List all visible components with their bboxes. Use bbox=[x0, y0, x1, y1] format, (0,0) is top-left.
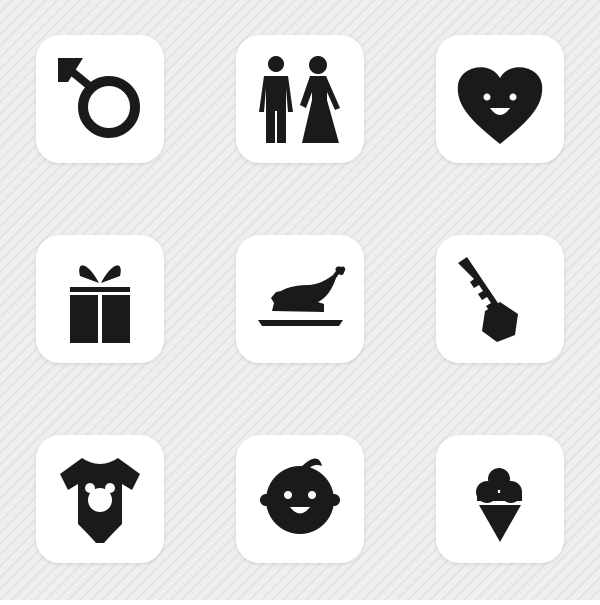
tile: heart bbox=[436, 35, 564, 163]
tile: baby face bbox=[236, 435, 364, 563]
icon: ice cream cone bbox=[476, 468, 522, 542]
tile: male symbol bbox=[36, 35, 164, 163]
icon: male symbol bbox=[58, 58, 135, 133]
icon: smiling heart bbox=[458, 67, 542, 144]
tile: baby onesie bbox=[36, 435, 164, 563]
tile: ice cream bbox=[436, 435, 564, 563]
tile: roast chicken bbox=[236, 235, 364, 363]
tile: gift bbox=[36, 235, 164, 363]
icon: couple bbox=[259, 56, 340, 143]
icon: baby face bbox=[260, 458, 340, 534]
icon: baby onesie bbox=[60, 458, 140, 543]
icon: roast chicken bbox=[258, 266, 345, 326]
tile: key bbox=[436, 235, 564, 363]
icon: gift box bbox=[70, 265, 130, 343]
tile: couple bbox=[236, 35, 364, 163]
icon: key bbox=[458, 257, 518, 342]
